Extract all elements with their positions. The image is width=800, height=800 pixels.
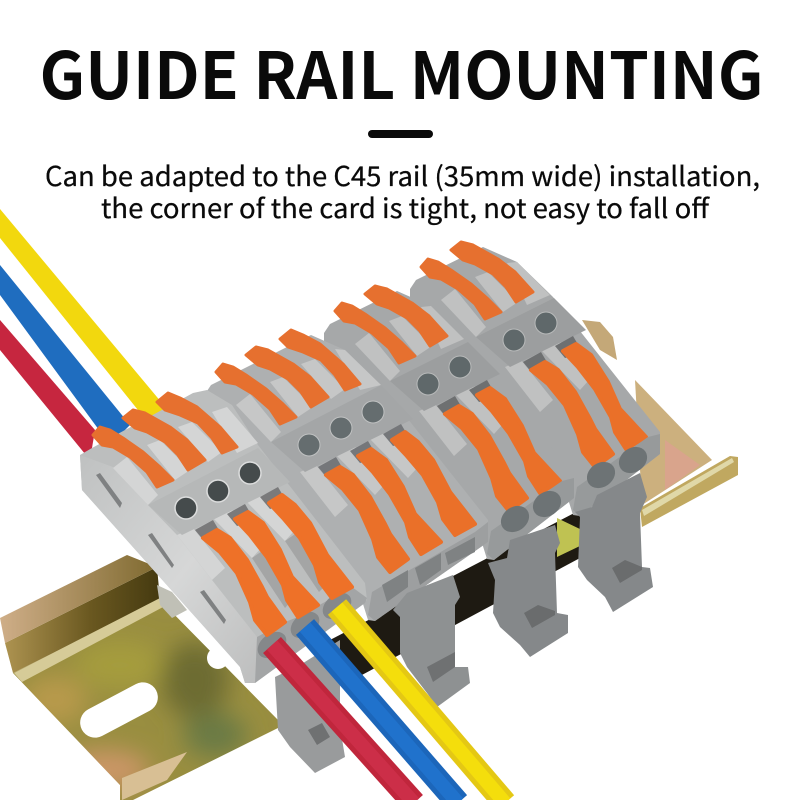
left side face (80, 455, 257, 683)
bottom face with slots (368, 522, 488, 621)
rear levers (216, 330, 360, 424)
rear levers (335, 286, 447, 363)
cable holes (175, 462, 261, 519)
title: GUIDE RAIL MOUNTING (40, 24, 764, 118)
rear levers (421, 242, 533, 319)
light strips (113, 407, 295, 580)
blue wire lower (305, 627, 458, 800)
hole band (271, 385, 413, 472)
mounting slot (75, 677, 163, 743)
cable holes (417, 356, 471, 395)
yellow wire upper (0, 209, 172, 425)
cable holes (503, 312, 557, 351)
front levers (203, 495, 352, 635)
subtitle text: Can be adapted to the C45 rail (35mm wide) installation, (45, 155, 760, 194)
lever slots (523, 336, 583, 374)
upper wires (0, 209, 172, 460)
subtitle text: the corner of the card is tight, not easy to fall off (101, 187, 711, 226)
DIN rail, left section with mounting slot (0, 555, 278, 800)
lower wires (272, 607, 505, 800)
wire mouths (253, 587, 367, 683)
bottom face with mouths (573, 434, 660, 516)
title underline bar (368, 130, 433, 138)
foot: block 1 (275, 640, 345, 773)
light strips (355, 306, 504, 456)
front levers (531, 344, 646, 467)
rail notch (207, 647, 229, 669)
bottom face with mouths (487, 478, 574, 560)
hole band (148, 448, 290, 535)
rear levers (93, 393, 237, 487)
connector block 3 (324, 286, 574, 560)
light strips (236, 349, 418, 517)
connector block 4 (410, 242, 660, 516)
block body (80, 390, 367, 683)
hole band (476, 298, 586, 367)
lever slots (195, 487, 288, 542)
hole band (390, 342, 500, 411)
side slots (96, 473, 226, 624)
block body (324, 291, 574, 560)
front levers (326, 432, 475, 572)
blue wire upper (0, 265, 130, 445)
light strips (441, 262, 590, 412)
foot: block 4 (575, 473, 653, 612)
cable holes (298, 401, 384, 456)
subtitle text (45, 155, 760, 226)
DIN rail, right end (330, 320, 738, 676)
yellow wire lower (337, 607, 505, 800)
lower lever channels (252, 530, 326, 608)
front levers (445, 388, 560, 511)
red wire lower (272, 645, 414, 800)
block body (410, 247, 660, 516)
rail clip (157, 585, 187, 618)
connector block 2 (205, 330, 488, 621)
red wire upper (0, 320, 95, 460)
connector block 1 (80, 390, 367, 683)
lever slots (318, 424, 411, 479)
foot: block 2 (393, 575, 470, 707)
foot: block 3 (488, 525, 568, 657)
block body (205, 335, 488, 621)
lever slots (437, 380, 497, 418)
